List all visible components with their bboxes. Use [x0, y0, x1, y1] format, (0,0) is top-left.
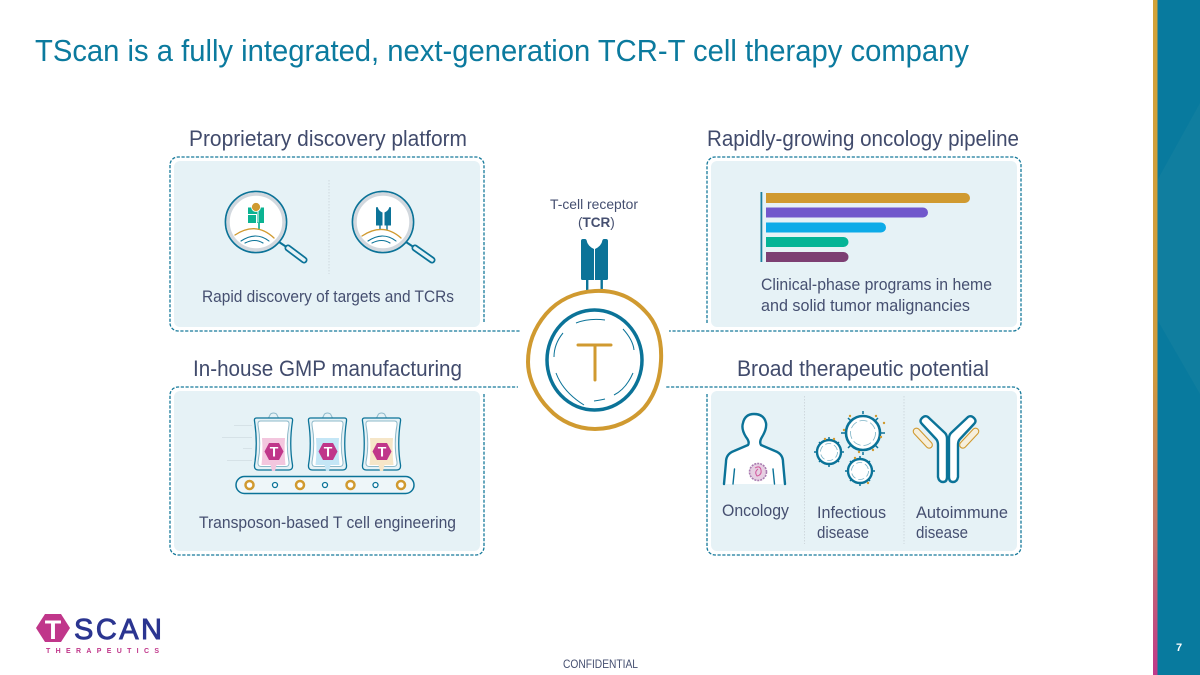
icon: viruses: [814, 411, 885, 486]
label: autoimmune disease: Autoimmune: [916, 504, 1008, 522]
speed lines: [222, 426, 252, 460]
panel: broad therapeutic potential: [665, 356, 1021, 555]
panel: in-house GMP manufacturing: [170, 356, 518, 555]
label: infectious disease: Infectious: [817, 504, 886, 522]
panel: proprietary discovery platform: [170, 126, 521, 331]
T-cell receptor label: [550, 196, 638, 230]
icon: magnifier with target: [226, 192, 304, 260]
confidential footer: CONFIDENTIAL: [563, 659, 639, 671]
logo: TScan Therapeutics: SCAN: [74, 614, 162, 646]
icon: T cell: [528, 291, 661, 429]
T-cell receptor label: (TCR): [578, 215, 615, 230]
icon: cell bag 2: T: [324, 444, 333, 460]
label: infectious disease: disease: [817, 524, 869, 542]
icon: human body with tumor: [724, 414, 785, 484]
T-cell receptor label: T-cell receptor: [550, 196, 638, 212]
logo: TScan Therapeutics: [36, 614, 162, 655]
icon: cell bag 3: T: [378, 444, 387, 460]
right side band: [1153, 0, 1200, 675]
panel: rapidly-growing oncology pipeline: [669, 126, 1021, 331]
icon: cell bag 1: [254, 413, 293, 471]
text: rapid discovery: Rapid discovery of targets and TCRs: [202, 288, 454, 306]
label: autoimmune disease: [916, 504, 1008, 542]
logo: TScan Therapeutics: T: [45, 615, 62, 645]
title: TScan is a fully integrated, next-generation TCR-T cell therapy company: [35, 33, 969, 68]
heading: oncology pipeline: Rapidly-growing oncology pipeline: [707, 126, 1019, 151]
text: clinical-phase programs: Clinical-phase programs in heme: [761, 276, 992, 294]
heading: proprietary discovery platform: Proprietary discovery platform: [189, 126, 467, 151]
icon: conveyor belt: [236, 476, 414, 494]
bar chart: [760, 192, 970, 262]
label: infectious disease: [817, 504, 886, 542]
label: autoimmune disease: disease: [916, 524, 968, 542]
icon: antibody: [912, 416, 980, 482]
icon: T-cell receptor: [581, 239, 608, 291]
page number: 7: [1176, 642, 1182, 654]
icon: cell bag 2: [308, 413, 347, 471]
icon: cell bag 1: T: [270, 444, 279, 460]
panel: rapidly-growing oncology pipeline: and solid tumor malignancies: [761, 297, 970, 315]
heading: GMP manufacturing: In-house GMP manufacturing: [193, 356, 462, 381]
icon: cell bag 3: [362, 413, 401, 471]
icon: magnifier with TCR: [352, 192, 432, 260]
label: oncology: Oncology: [722, 502, 790, 520]
text: transposon-based: Transposon-based T cell engineering: [199, 514, 456, 532]
logo: TScan Therapeutics: THERAPEUTICS: [46, 648, 159, 655]
heading: therapeutic potential: Broad therapeutic potential: [737, 356, 989, 381]
